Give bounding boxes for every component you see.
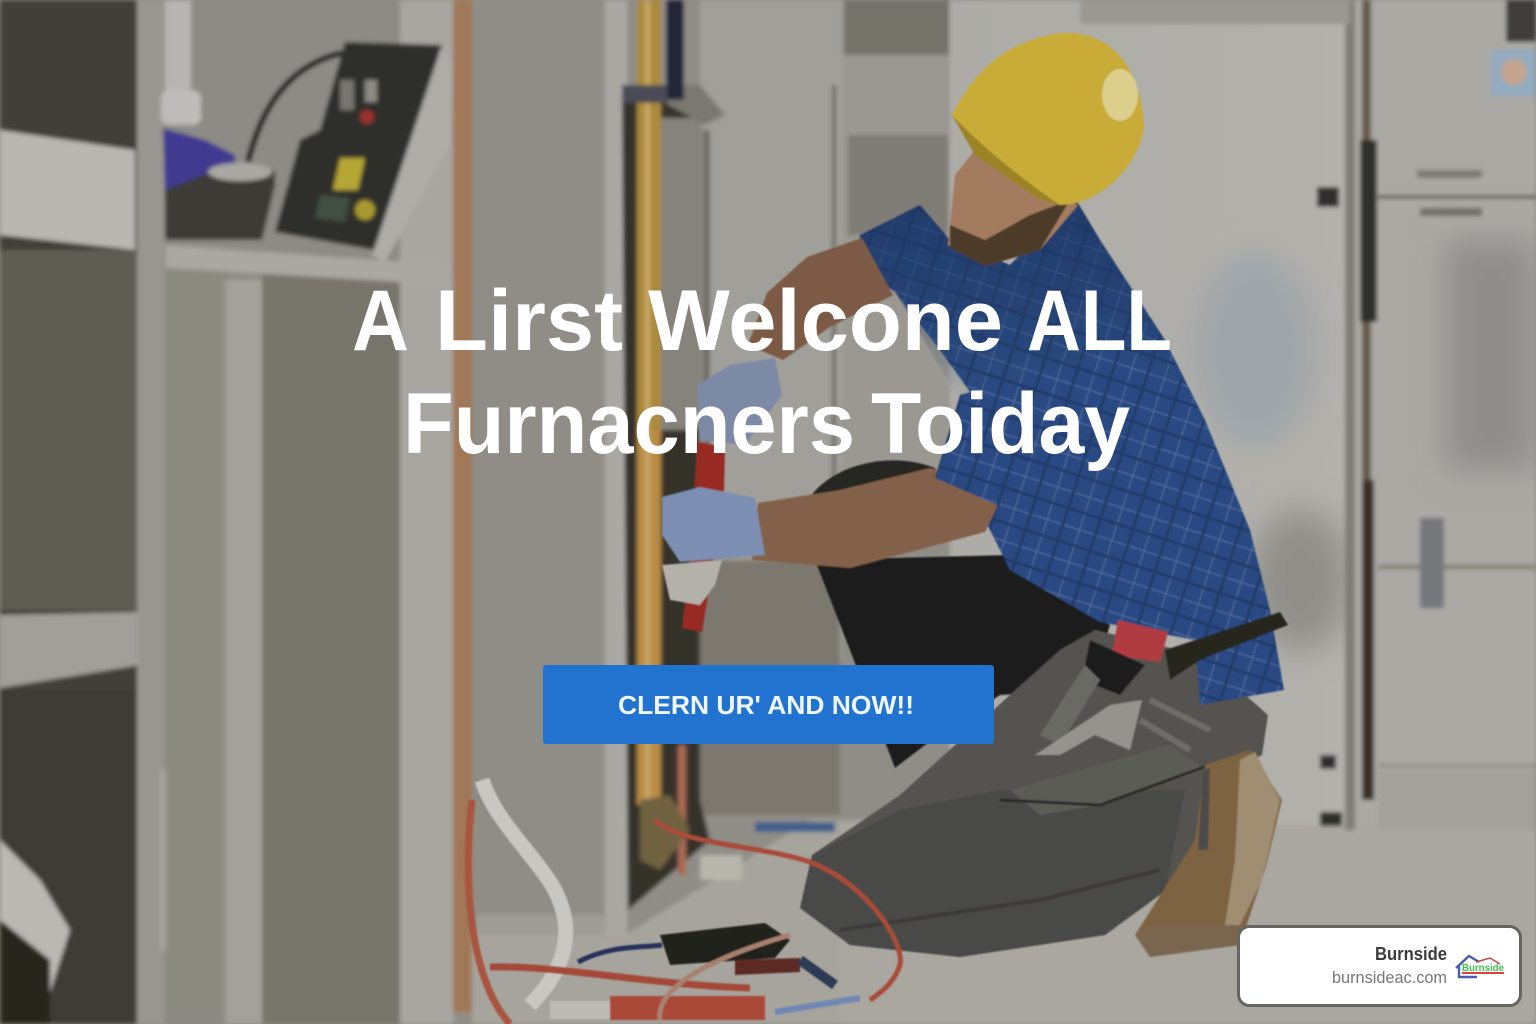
centre panel [472, 0, 1536, 1024]
dark thigh and knee [808, 460, 1110, 768]
floor [840, 825, 1536, 1024]
red screwdriver [682, 442, 725, 632]
call to action button [543, 665, 994, 744]
control panel [248, 42, 452, 262]
tester [660, 923, 790, 965]
white connectors [662, 560, 722, 605]
upper arm [748, 238, 893, 360]
red cable right [655, 820, 900, 1000]
right metal cabinet [1080, 0, 1536, 830]
gloves [662, 358, 782, 562]
title: ALL [1027, 273, 1172, 369]
pink cable [660, 935, 790, 1020]
title: Welcone [648, 273, 1003, 369]
title: Toiday [871, 376, 1130, 472]
badge logo [1456, 956, 1504, 977]
wall stain [1195, 255, 1350, 650]
white pipe and valve [161, 0, 275, 240]
red bundle [490, 967, 750, 988]
right wall [950, 0, 1350, 830]
forearm [752, 468, 1005, 568]
title [352, 273, 1172, 472]
hose, cables and tools on floor [468, 780, 900, 1024]
grey cabinet column [166, 0, 454, 1024]
badge logo: Burnside [1462, 962, 1504, 974]
trousers [800, 630, 1268, 957]
hard hat [952, 33, 1144, 205]
title: Furnacners [403, 376, 855, 472]
face [948, 150, 1078, 266]
call to action button: CLERN UR' AND NOW!! [618, 690, 914, 720]
furnace interior with gas pipe [622, 0, 835, 910]
badge name: Burnside [1375, 944, 1447, 964]
worker [662, 33, 1288, 957]
white hose [482, 780, 566, 1005]
source badge [1238, 926, 1520, 1006]
belt and tool pouch [1035, 612, 1288, 755]
red cable left [468, 800, 510, 1024]
copper pipe [453, 0, 472, 1012]
left shelving unit [0, 0, 190, 1024]
blue cable [578, 945, 662, 962]
boot [1135, 750, 1282, 957]
badge url: burnsideac.com [1332, 969, 1447, 987]
title: Lirst [435, 273, 623, 369]
title: A [352, 273, 409, 369]
sleeve [935, 345, 1200, 515]
shirt [858, 198, 1284, 705]
